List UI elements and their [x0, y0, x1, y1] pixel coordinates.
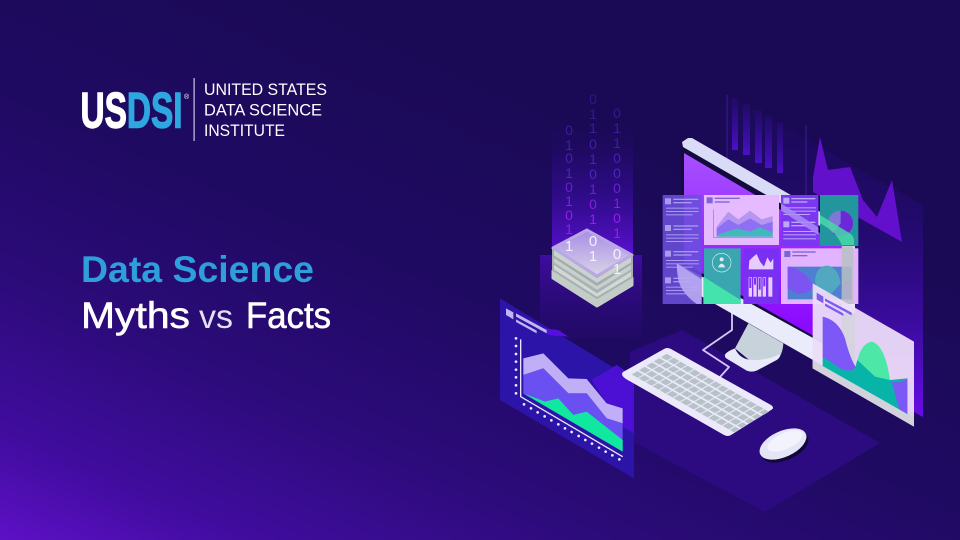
keyboard: [622, 348, 773, 436]
cable: [703, 312, 732, 377]
area chart card: [704, 195, 779, 245]
stand base: [725, 348, 780, 372]
bezel seen through panel: [842, 313, 855, 368]
panel header: [506, 308, 513, 319]
binary digits: 01010101: [565, 122, 573, 237]
glow under stack: [540, 255, 642, 338]
title line two: Myths: [81, 295, 190, 336]
institute name: DATA SCIENCE: [204, 100, 322, 120]
back panel frame lines: [727, 95, 806, 195]
data column with server stack: [540, 91, 642, 338]
mouse shadow: [757, 425, 813, 469]
white binary digits: 1: [565, 238, 573, 255]
panel header: [817, 293, 823, 303]
mouse body: [755, 422, 811, 466]
chin seen through cards: [677, 203, 854, 304]
axis dots: [515, 337, 621, 461]
mixed chart card: [743, 248, 779, 304]
right bezel: [842, 235, 855, 370]
purple blob: [823, 317, 856, 371]
profile card: [704, 248, 741, 304]
text card: [781, 195, 818, 246]
desk mat: [630, 330, 880, 512]
title: [81, 249, 331, 336]
logo divider: [194, 78, 195, 141]
white binary digits: 0: [589, 233, 597, 250]
list card: [663, 195, 702, 304]
black inner bezel: [681, 145, 845, 362]
logo: [80, 78, 327, 141]
registered mark: ®: [184, 93, 190, 101]
title line one: Data Science: [81, 249, 314, 290]
binary digits: [565, 91, 621, 241]
keyboard body: [622, 348, 773, 436]
keys: [630, 353, 770, 433]
screen: [684, 153, 842, 352]
floating dashboard: [663, 195, 858, 304]
right front chart panel: [813, 283, 914, 427]
white binary digits: 1: [589, 248, 597, 265]
server layers: [553, 230, 632, 306]
area lilac: [523, 353, 623, 423]
purple accent: [592, 365, 634, 433]
panel sheet: [813, 283, 914, 427]
stand neck: [735, 323, 783, 363]
title line two: Facts: [246, 295, 331, 336]
title line two: vs: [199, 298, 233, 335]
title line two: [81, 295, 331, 336]
mouse top highlight: [764, 426, 806, 456]
white binary digits: [565, 233, 621, 278]
purple right area: [892, 378, 907, 414]
monitor stand: [725, 323, 783, 372]
mouse: [755, 422, 813, 469]
back chart panel: [727, 95, 923, 417]
pie chart card: [820, 195, 858, 246]
institute name: INSTITUTE: [204, 121, 285, 140]
area green: [523, 393, 623, 452]
white binary digits: 1: [613, 261, 621, 278]
light beam: [552, 125, 633, 255]
panel lower edge: [813, 360, 914, 427]
institute name: [204, 80, 327, 140]
binary digits: 011010101: [589, 91, 597, 227]
white binary digits: 0: [613, 246, 621, 263]
area violet: [523, 368, 623, 452]
back bar chart: [732, 98, 783, 173]
back mountain chart: [813, 137, 902, 242]
left area chart panel: [500, 298, 634, 478]
axes: [521, 339, 623, 457]
binary digits: 011000101: [613, 105, 621, 241]
monitor: [677, 138, 855, 384]
panel base: [500, 298, 634, 478]
back panel: [727, 95, 923, 417]
blob chart card: [781, 248, 858, 304]
logo wordmark: USDSI: [80, 82, 182, 138]
top bezel: [682, 138, 855, 241]
chin: [677, 263, 855, 384]
purple header accent: [543, 328, 568, 337]
institute name: UNITED STATES: [204, 80, 327, 99]
teal area: [823, 355, 907, 414]
green blob: [857, 342, 890, 380]
